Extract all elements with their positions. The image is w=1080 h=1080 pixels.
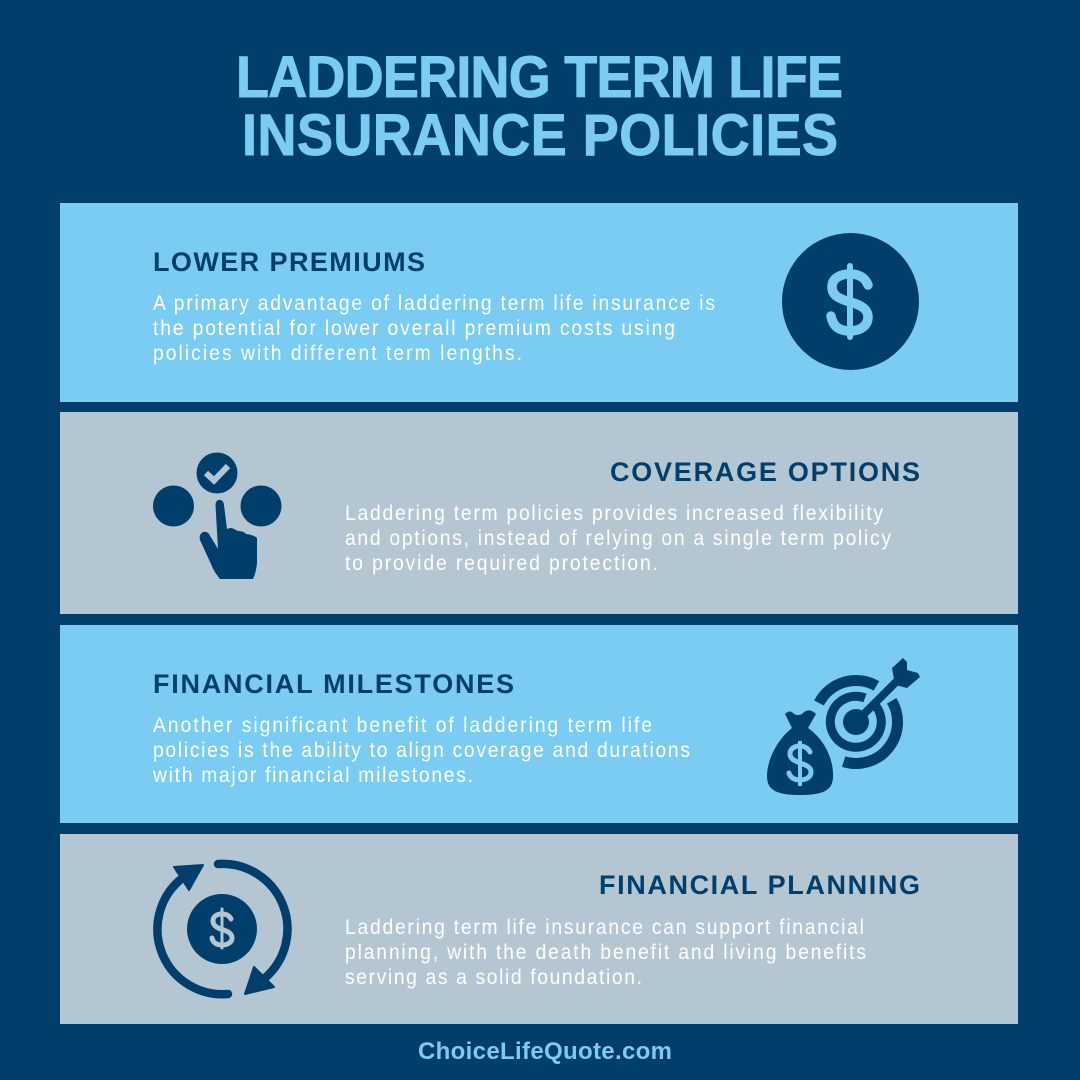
panel: coverage options	[60, 412, 1018, 614]
title: LADDERING TERM LIFE	[236, 44, 843, 109]
footer: website: ChoiceLifeQuote.com	[418, 1038, 672, 1065]
text block: coverage options: and options, instead of relying on a single term policy	[345, 527, 892, 550]
text block: financial planning	[345, 916, 866, 989]
text block: financial planning: Laddering term life insurance can support financial	[345, 916, 864, 939]
text block: lower premiums: policies with different term lengths.	[153, 342, 522, 365]
text block: lower premiums	[153, 292, 715, 365]
text block: financial milestones: Another significant benefit of laddering term life	[153, 714, 652, 737]
text block: lower premiums: A primary advantage of laddering term life insurance is	[153, 292, 715, 315]
text block: financial milestones: with major financial milestones.	[152, 764, 473, 787]
text block: coverage options: to provide required protection.	[345, 552, 658, 575]
text block: coverage options: Laddering term policies provides increased flexibility	[345, 502, 884, 525]
icon: dollar with circular arrows	[157, 864, 287, 994]
text block: coverage options	[345, 502, 892, 575]
panel: financial planning	[60, 834, 1018, 1024]
text block: lower premiums: the potential for lower overall premium costs using	[153, 317, 675, 340]
icon: dollar coin	[782, 233, 919, 370]
heading: coverage options: COVERAGE OPTIONS	[610, 457, 920, 487]
icon: money bag and target	[767, 658, 920, 795]
panel: lower premiums	[60, 203, 1018, 402]
text block: financial planning: planning, with the death benefit and living benefits	[345, 941, 866, 964]
text block: financial milestones: policies is the ability to align coverage and durations	[153, 739, 690, 762]
panel: financial milestones	[60, 625, 1018, 823]
heading: lower premiums: LOWER PREMIUMS	[153, 247, 425, 277]
heading: financial milestones: FINANCIAL MILESTONES	[153, 669, 514, 699]
text block: financial milestones	[152, 714, 690, 787]
text block: financial planning: serving as a solid foundation.	[345, 966, 642, 989]
heading: financial planning: FINANCIAL PLANNING	[599, 870, 920, 900]
title: INSURANCE POLICIES	[242, 102, 838, 167]
title	[236, 44, 843, 167]
icon: hand choosing option	[153, 452, 282, 579]
